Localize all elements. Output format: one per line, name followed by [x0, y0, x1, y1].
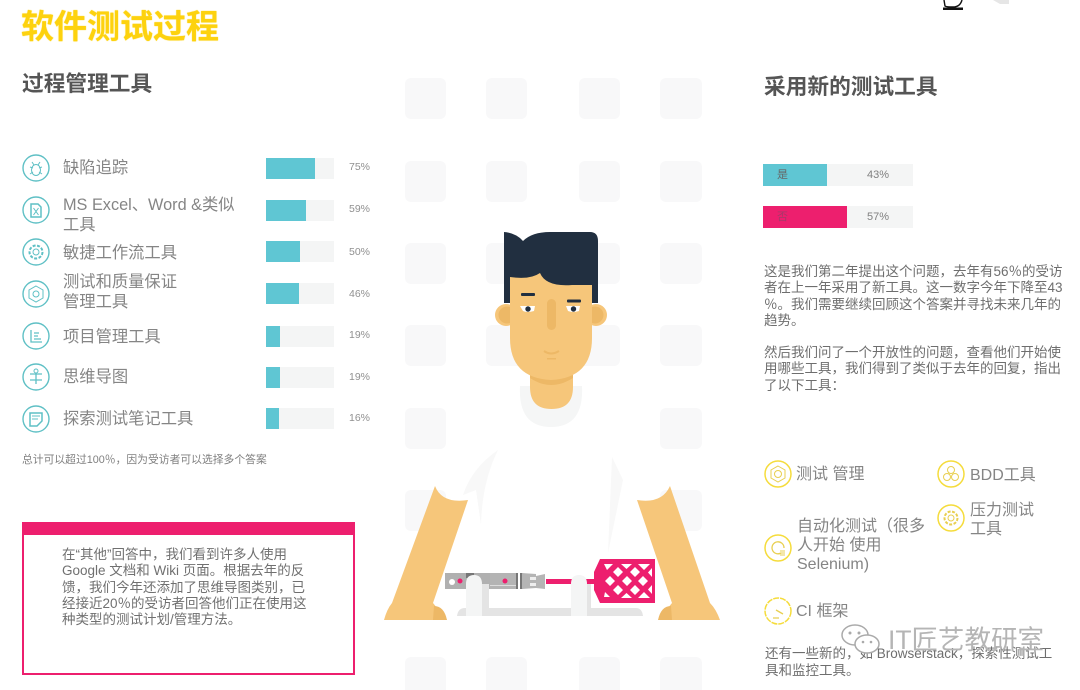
tool: test management: 测试 管理: [796, 466, 864, 483]
text block: open question: 了以下工具：: [764, 378, 845, 393]
background square grid and character illustration: [384, 232, 720, 620]
bug swatter: [445, 559, 655, 603]
row: excel: 59%: [349, 203, 370, 215]
tool: CI framework: CI 框架: [796, 603, 848, 620]
row: defect tracking: 缺陷追踪: [63, 159, 128, 177]
row: project management: 19%: [349, 329, 370, 341]
tool: automated testing: 自动化测试（很多人开始 使用Selenium): [797, 518, 925, 573]
tool: load testing: [937, 502, 1034, 538]
heading: adopting new test tools: 采用新的测试工具: [764, 74, 938, 99]
row: exploratory testing notes: [22, 405, 370, 433]
text block: analysis: 趋势。: [764, 313, 804, 328]
row: exploratory testing notes: 探索测试笔记工具: [63, 410, 193, 428]
text block: analysis: ％。我们需要继续回顾这个答案并寻找未来几年的: [764, 297, 1061, 312]
text block: analysis: [764, 264, 1063, 328]
tool: BDD: [937, 460, 1036, 488]
icon: cropped figure at top right: [943, 0, 1009, 10]
table: [457, 575, 643, 616]
bar chart: yes or no: 否: [777, 211, 788, 223]
bar chart: yes or no: [763, 164, 913, 228]
text block: other new tools: [765, 646, 1052, 678]
footnote: 总计可以超过100％，因为受访者可以选择多个答案: [22, 454, 267, 466]
shirt: [433, 385, 672, 620]
tool: load testing: 压力测试: [970, 502, 1034, 519]
head: [495, 232, 607, 409]
callout: other answers: [22, 522, 355, 675]
row: test and QA management: 管理工具: [63, 292, 128, 310]
tool: BDD: BDD工具: [970, 467, 1036, 484]
text block: open question: 用哪些工具，我们得到了类似于去年的回复，指出: [764, 361, 1061, 376]
watermark: IT匠艺教研室: [888, 625, 1044, 655]
text block: open question: 然后我们问了一个开放性的问题，查看他们开始使: [764, 345, 1061, 360]
arms: [384, 486, 720, 620]
text block: other new tools: 还有一些新的，如 Browserstack，探索性测试工: [765, 646, 1052, 661]
row: defect tracking: 75%: [349, 161, 370, 173]
callout: other answers: 在“其他”回答中，我们看到许多人使用Google 文档和 Wiki 页面。根据去年的反馈，我们今年还添加了思维导图类别，已经接近20％的受访者回答他们正在使用这种类型的测试计划/管理方法。: [62, 547, 307, 627]
bar chart: process management tools: [22, 154, 370, 433]
text block: other new tools: 具和监控工具。: [765, 662, 860, 678]
bar chart: yes or no: 57%: [867, 211, 889, 223]
row: mind map: 19%: [349, 371, 370, 383]
row: excel: [22, 196, 370, 234]
row: mind map: [22, 363, 370, 391]
row: exploratory testing notes: 16%: [349, 412, 370, 424]
row: defect tracking: [22, 154, 370, 182]
text block: open question: [764, 345, 1061, 393]
tool: CI framework: [764, 597, 848, 625]
row: mind map: 思维导图: [63, 368, 128, 386]
row: agile workflow: 50%: [349, 246, 370, 258]
row: test and QA management: 测试和质量保证: [63, 273, 177, 291]
tool: load testing: 工具: [970, 521, 1002, 538]
text block: analysis: 者在上一年采用了新工具。这一数字今年下降至43: [764, 280, 1063, 295]
row: agile workflow: [22, 238, 370, 266]
heading: process management tools: 过程管理工具: [22, 71, 152, 96]
row: test and QA management: [22, 273, 370, 310]
row: project management: [22, 322, 370, 350]
row: agile workflow: 敏捷工作流工具: [63, 244, 177, 262]
tool: test management: [764, 460, 864, 488]
row: excel: MS Excel、Word &类似工具: [63, 196, 235, 234]
bar chart: yes or no: 43%: [867, 169, 889, 181]
row: project management: 项目管理工具: [63, 328, 161, 346]
row: test and QA management: 46%: [349, 288, 370, 300]
bar chart: yes or no: 是: [777, 169, 788, 181]
text block: analysis: 这是我们第二年提出这个问题，去年有56％的受访: [764, 264, 1063, 279]
title: 软件测试过程: [21, 8, 219, 45]
